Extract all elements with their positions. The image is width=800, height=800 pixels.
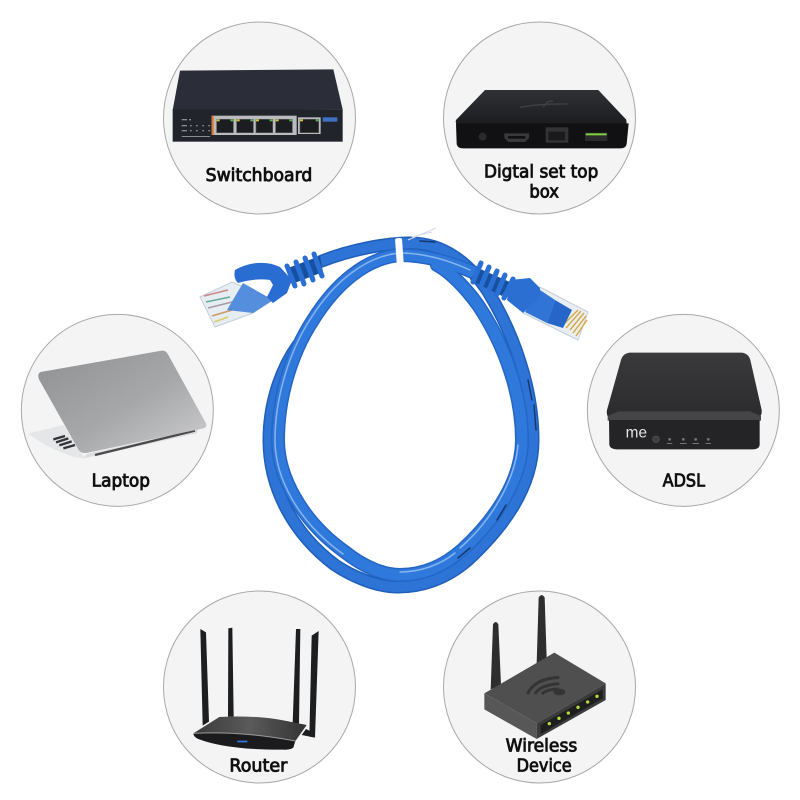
- icon: network switch: [173, 69, 343, 142]
- strain relief left: [287, 254, 323, 286]
- panel: ADSL: [587, 314, 779, 506]
- icon: set top box: [456, 90, 629, 148]
- icon: router: [193, 628, 319, 750]
- label: ADSL: ADSL: [663, 472, 705, 492]
- cable tie: [395, 228, 436, 267]
- icon: laptop: [28, 351, 206, 458]
- panel: digital set top box: [443, 22, 635, 214]
- right connector: [470, 263, 588, 340]
- icon: ADSL modem: [607, 353, 762, 449]
- panel: wireless device: [443, 591, 635, 783]
- label: Switchboard: Switchboard: [206, 166, 312, 186]
- panel: switchboard: [163, 22, 355, 214]
- label: Router: Router: [229, 757, 288, 777]
- logo: me: me: [626, 424, 647, 441]
- label: Laptop: Laptop: [92, 472, 150, 492]
- label: Digtal set top box: [484, 163, 598, 203]
- blue ethernet cable: [200, 228, 588, 587]
- panel: laptop: [21, 314, 213, 506]
- label: Digtal set top box: Digtal set top: [484, 163, 598, 183]
- icon: wireless router: [484, 595, 606, 739]
- label: Digtal set top box: box: [529, 183, 559, 203]
- label: Wireless Device: [506, 736, 577, 777]
- cable loop: [269, 241, 536, 587]
- panel: router: [163, 591, 355, 783]
- label: Wireless Device: Wireless: [506, 736, 577, 756]
- left connector: [200, 254, 323, 327]
- strain relief right: [470, 263, 513, 298]
- label: Wireless Device: Device: [517, 757, 572, 777]
